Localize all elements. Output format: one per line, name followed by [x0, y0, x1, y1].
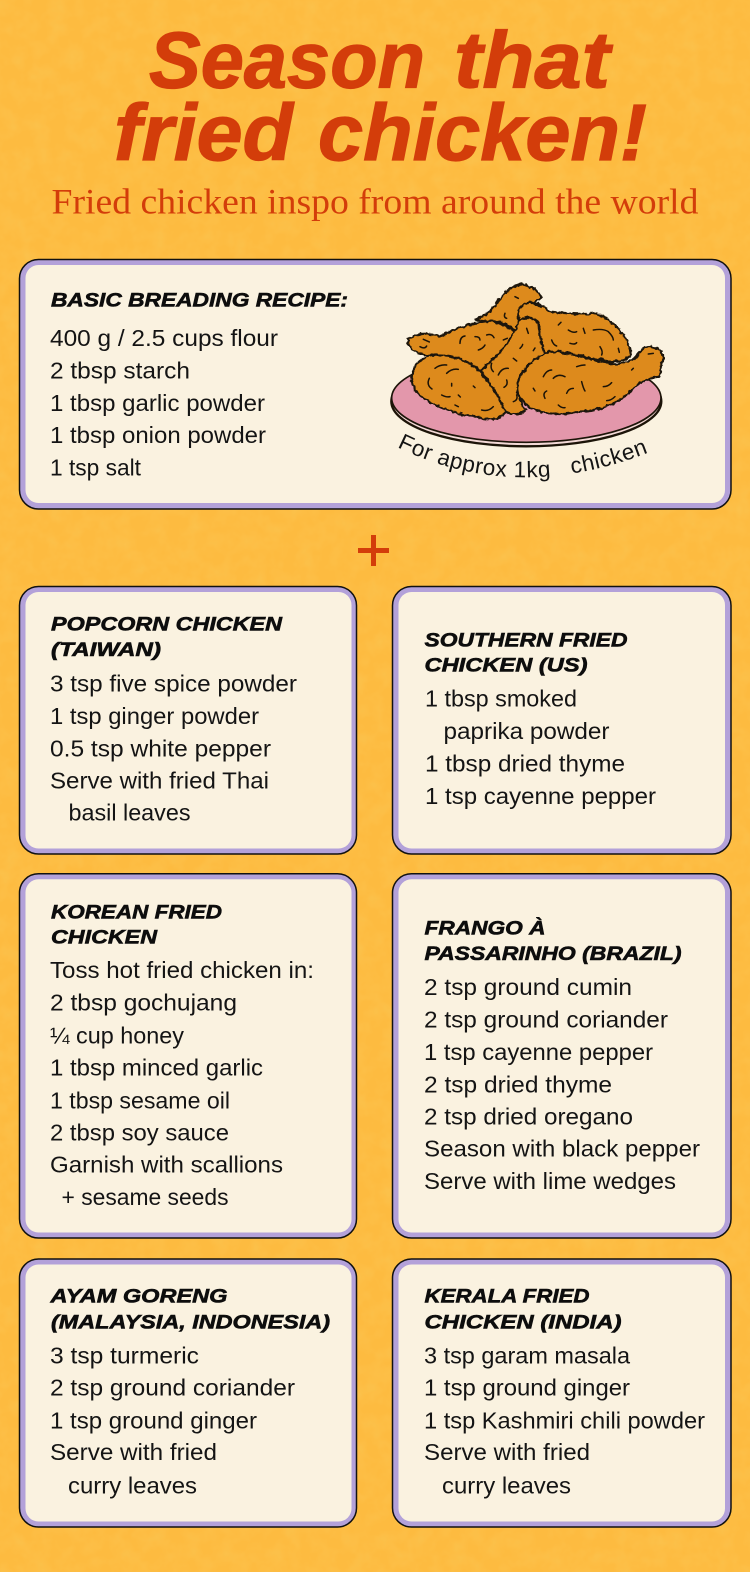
crust crumb marks — [420, 297, 653, 411]
ingredient list: kerala fried chicken — [424, 1342, 705, 1498]
ingredient list: korean fried chicken: ¼ cup honey — [50, 1022, 185, 1048]
ingredient list: kerala fried chicken: curry leaves — [442, 1472, 571, 1498]
ingredient list: frango a passarinho: 2 tsp dried thyme — [424, 1071, 612, 1097]
heading: popcorn chicken — [51, 614, 283, 661]
heading: ayam goreng: AYAM GORENG — [49, 1286, 228, 1308]
ingredient list: southern fried chicken: 1 tbsp smoked — [425, 686, 577, 712]
title: chicken! — [318, 88, 647, 177]
subtitle: Fried chicken inspo from around the world — [52, 181, 698, 221]
ingredient list: frango a passarinho: Season with black pepper — [424, 1136, 700, 1162]
ingredient list: ayam goreng: 1 tsp ground ginger — [50, 1407, 257, 1433]
heading: ayam goreng — [49, 1286, 330, 1333]
heading: korean fried chicken — [51, 901, 222, 948]
ingredient list: basic breading: 1 tsp salt — [50, 455, 142, 481]
ingredient list: popcorn chicken — [50, 671, 297, 826]
heading: popcorn chicken: (TAIWAN) — [51, 639, 161, 661]
ingredient list: kerala fried chicken: 1 tsp Kashmiri chili powder — [424, 1407, 705, 1433]
heading: kerala fried chicken: KERALA FRIED — [424, 1286, 590, 1308]
heading: frango a passarinho: FRANGO À — [424, 916, 546, 939]
ingredient list: ayam goreng: 3 tsp turmeric — [50, 1342, 199, 1368]
ingredient list: basic breading: 2 tbsp starch — [50, 357, 190, 383]
plate — [391, 354, 661, 446]
ingredient list: popcorn chicken: basil leaves — [68, 800, 190, 826]
title — [114, 16, 647, 177]
ingredient list: southern fried chicken: paprika powder — [444, 718, 610, 744]
heading: kerala fried chicken — [424, 1286, 622, 1333]
panel: southern fried chicken — [392, 586, 731, 854]
title: that — [454, 16, 614, 104]
ingredient list: korean fried chicken: 1 tbsp minced garlic — [50, 1055, 263, 1081]
ingredient list: kerala fried chicken: 3 tsp garam masala — [424, 1342, 630, 1368]
heading: southern fried chicken — [424, 630, 628, 677]
heading: basic breading recipe: BASIC BREADING RECIPE: — [51, 290, 348, 312]
heading: korean fried chicken: KOREAN FRIED — [51, 901, 222, 923]
panel: basic breading recipe — [18, 258, 732, 510]
ingredient list: popcorn chicken: 0.5 tsp white pepper — [50, 736, 271, 762]
heading: kerala fried chicken: CHICKEN (INDIA) — [424, 1311, 622, 1333]
ingredient list: ayam goreng — [50, 1342, 295, 1498]
heading: popcorn chicken: POPCORN CHICKEN — [51, 614, 283, 636]
ingredient list: kerala fried chicken: Serve with fried — [424, 1439, 590, 1465]
ingredient list: southern fried chicken: 1 tbsp dried thyme — [425, 751, 625, 777]
title: Season — [149, 16, 425, 104]
heading: southern fried chicken: SOUTHERN FRIED — [424, 630, 628, 652]
ingredient list: southern fried chicken — [425, 686, 656, 809]
ingredient list: korean fried chicken: 1 tbsp sesame oil — [50, 1087, 230, 1113]
ingredient list: korean fried chicken: + sesame seeds — [62, 1184, 228, 1210]
ingredient list: ayam goreng: Serve with fried — [50, 1439, 217, 1465]
ingredient list: frango a passarinho: 2 tsp ground coriander — [424, 1006, 668, 1032]
panel: frango a passarinho — [392, 874, 731, 1238]
panel: korean fried chicken — [20, 874, 356, 1238]
title: fried — [114, 88, 295, 177]
ingredient list: korean fried chicken: Toss hot fried chicken in: — [50, 957, 314, 983]
heading: ayam goreng: (MALAYSIA, INDONESIA) — [51, 1311, 330, 1333]
ingredient list: korean fried chicken: 2 tbsp gochujang — [50, 990, 237, 1016]
ingredient list: korean fried chicken: Garnish with scallions — [50, 1152, 283, 1178]
ingredient list: kerala fried chicken: 1 tsp ground ginger — [424, 1375, 630, 1401]
ingredient list: basic breading: 400 g / 2.5 cups flour — [50, 325, 278, 351]
ingredient list: basic breading — [50, 325, 278, 481]
ingredient list: basic breading: 1 tbsp onion powder — [50, 422, 266, 448]
ingredient list: popcorn chicken: Serve with fried Thai — [50, 767, 269, 793]
illustration: fried chicken on a pink plate — [391, 284, 663, 446]
caption: for approx 1kg chicken: For approx 1kg chicken — [398, 434, 647, 482]
ingredient list: popcorn chicken: 3 tsp five spice powder — [50, 671, 297, 697]
ingredient list: popcorn chicken: 1 tsp ginger powder — [50, 703, 259, 729]
heading: frango a passarinho: PASSARINHO (BRAZIL) — [424, 943, 682, 965]
panel: popcorn chicken — [20, 586, 356, 854]
ingredient list: frango a passarinho: 2 tsp dried oregano — [424, 1103, 633, 1129]
ingredient list: ayam goreng: curry leaves — [68, 1472, 197, 1498]
ingredient list: basic breading: 1 tbsp garlic powder — [50, 390, 265, 416]
fried chicken pieces — [408, 284, 663, 419]
ingredient list: korean fried chicken: 2 tbsp soy sauce — [50, 1120, 229, 1146]
ingredient list: southern fried chicken: 1 tsp cayenne pepper — [425, 783, 656, 809]
ingredient list: frango a passarinho: 2 tsp ground cumin — [424, 974, 632, 1000]
panel: kerala fried chicken — [392, 1259, 731, 1527]
ingredient list: frango a passarinho — [424, 974, 700, 1194]
ingredient list: korean fried chicken — [50, 957, 314, 1210]
ingredient list: ayam goreng: 2 tsp ground coriander — [50, 1375, 295, 1401]
heading: korean fried chicken: CHICKEN — [51, 926, 158, 948]
panel: ayam goreng — [20, 1259, 356, 1527]
heading: frango a passarinho — [424, 916, 682, 965]
plus sign — [358, 535, 389, 566]
ingredient list: frango a passarinho: 1 tsp cayenne pepper — [424, 1039, 653, 1065]
heading: southern fried chicken: CHICKEN (US) — [424, 655, 588, 677]
ingredient list: frango a passarinho: Serve with lime wedges — [424, 1168, 676, 1194]
